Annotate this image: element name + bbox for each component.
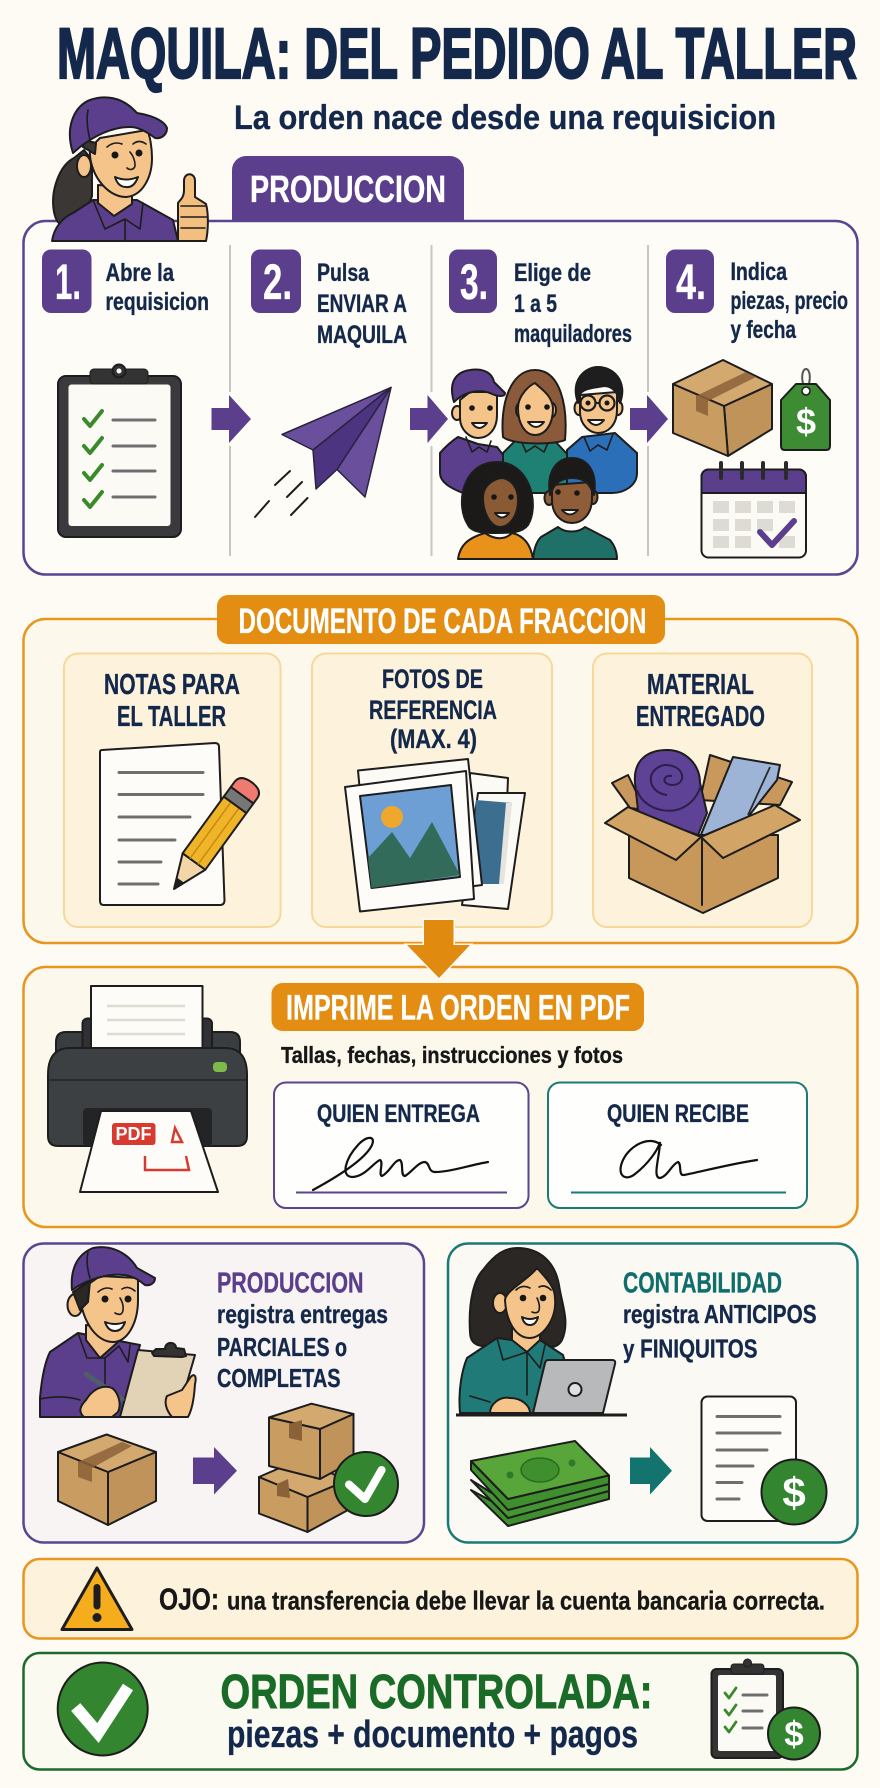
step 1: 1. [55,254,81,310]
tab: PRODUCCION: PRODUCCION [250,169,446,211]
icon: clipboard with dollar [712,1659,820,1760]
panel: produccion registra entregas: PARCIALES o [217,1332,347,1362]
icon: stacked boxes [259,1404,354,1532]
panel: producción steps [24,156,858,574]
panel: produccion registra entregas [24,1244,424,1542]
step 3: maquiladores [514,320,632,348]
signature [621,1141,757,1178]
icon: paper plane [255,388,391,517]
tab: DOCUMENTO DE CADA FRACCION [217,595,665,644]
text: contents of order: Tallas, fechas, instrucciones y fotos [281,1042,623,1068]
card: notas para el taller [64,654,280,927]
tab: DOCUMENTO DE CADA FRACCION: DOCUMENTO DE CADA FRACCION [238,602,646,641]
panel: produccion registra entregas: COMPLETAS [217,1363,340,1393]
tab: IMPRIME LA ORDEN EN PDF: IMPRIME LA ORDEN EN PDF [286,988,630,1028]
panel: orden controlada: ORDEN CONTROLADA: [220,1666,652,1719]
step 1: Abre la [106,259,175,287]
panel: contabilidad registra pagos [448,1244,858,1542]
icon: clipboard checklist [58,364,181,537]
step 4: Indica [730,258,788,286]
arrow: step 1 to 2 [212,395,251,443]
character: man with clipboard [40,1247,196,1417]
card: quien recibe: QUIEN RECIBE [607,1100,749,1128]
panel: orden controlada: piezas + documento + pagos [227,1714,638,1756]
subtitle: La orden nace desde una requisicion [234,99,776,137]
callout: warning: OJO: [159,1582,219,1616]
icon: printer: PDF [116,1124,152,1144]
panel: contabilidad registra pagos: CONTABILIDAD [623,1268,782,1300]
panel: produccion registra entregas: PRODUCCION [217,1268,364,1300]
step 2: 2. [263,254,292,310]
panel: orden controlada [24,1653,858,1770]
icon: warning triangle [62,1568,132,1630]
step 2 [251,250,407,349]
step 4: y fecha [730,316,797,344]
card: material entregado [593,654,812,927]
icon: large check [58,1662,148,1756]
card: material entregado: MATERIAL [647,669,754,701]
icon: price tag: $ [796,401,816,442]
card: quien entrega [274,1082,528,1208]
icon: receipt with dollar [702,1396,826,1524]
step 3 [449,250,632,348]
icon: open box with fabric [605,750,800,913]
step 2: ENVIAR A [317,290,407,318]
card: fotos de referencia: (MAX. 4) [390,724,477,754]
step 2: MAQUILA [317,321,407,349]
icon: green check badge [334,1452,398,1516]
icon: paper and pencil [100,743,263,905]
tab: PRODUCCION [232,156,464,221]
icon: receipt with dollar: $ [782,1469,806,1516]
arrow: boxes [193,1447,237,1494]
icon: cardboard box [673,360,772,456]
panel: produccion registra entregas: registra entregas [217,1299,388,1329]
arrow: payments [630,1447,672,1494]
character: woman with cap giving thumbs up [52,97,208,241]
card: quien entrega: QUIEN ENTREGA [317,1100,480,1128]
panel: contabilidad registra pagos: y FINIQUITOS [623,1334,758,1364]
icon: stack of money [471,1441,609,1526]
icon: single box [58,1434,156,1525]
arrow: down to print [407,920,470,978]
icon: group of maquiladores [440,367,637,559]
card: notas para el taller: NOTAS PARA [104,669,240,701]
step 2: Pulsa [317,259,370,287]
arrow: step 3 to 4 [630,395,668,443]
card: notas para el taller: EL TALLER [117,701,226,733]
step 1 [42,250,209,316]
panel: imprime la orden en PDF [24,967,858,1227]
callout: warning [24,1559,858,1638]
icon: clipboard with dollar: $ [784,1715,804,1754]
step 3: 3. [460,254,488,310]
step 4 [666,250,848,344]
step 4: 4. [676,254,706,310]
icon: stack of photos [345,759,525,912]
card: fotos de referencia: REFERENCIA [369,695,497,725]
panel: contabilidad registra pagos: registra ANTICIPOS [623,1299,816,1329]
icon: price tag [781,369,830,450]
step 3: 1 a 5 [514,290,557,318]
panel: documento de cada fraccion [24,595,858,943]
icon: printer [48,986,247,1192]
step 1: requisicion [106,288,209,316]
icon: calendar [702,463,806,558]
character: woman at laptop [456,1248,627,1415]
arrow: step 2 to 3 [410,395,448,443]
signature [313,1138,488,1190]
step 3: Elige de [514,259,591,287]
card: material entregado: ENTREGADO [636,701,765,733]
tab: IMPRIME LA ORDEN EN PDF [272,983,644,1031]
card: quien recibe [548,1082,807,1208]
card: fotos de referencia [312,654,552,927]
card: fotos de referencia: FOTOS DE [382,664,483,694]
